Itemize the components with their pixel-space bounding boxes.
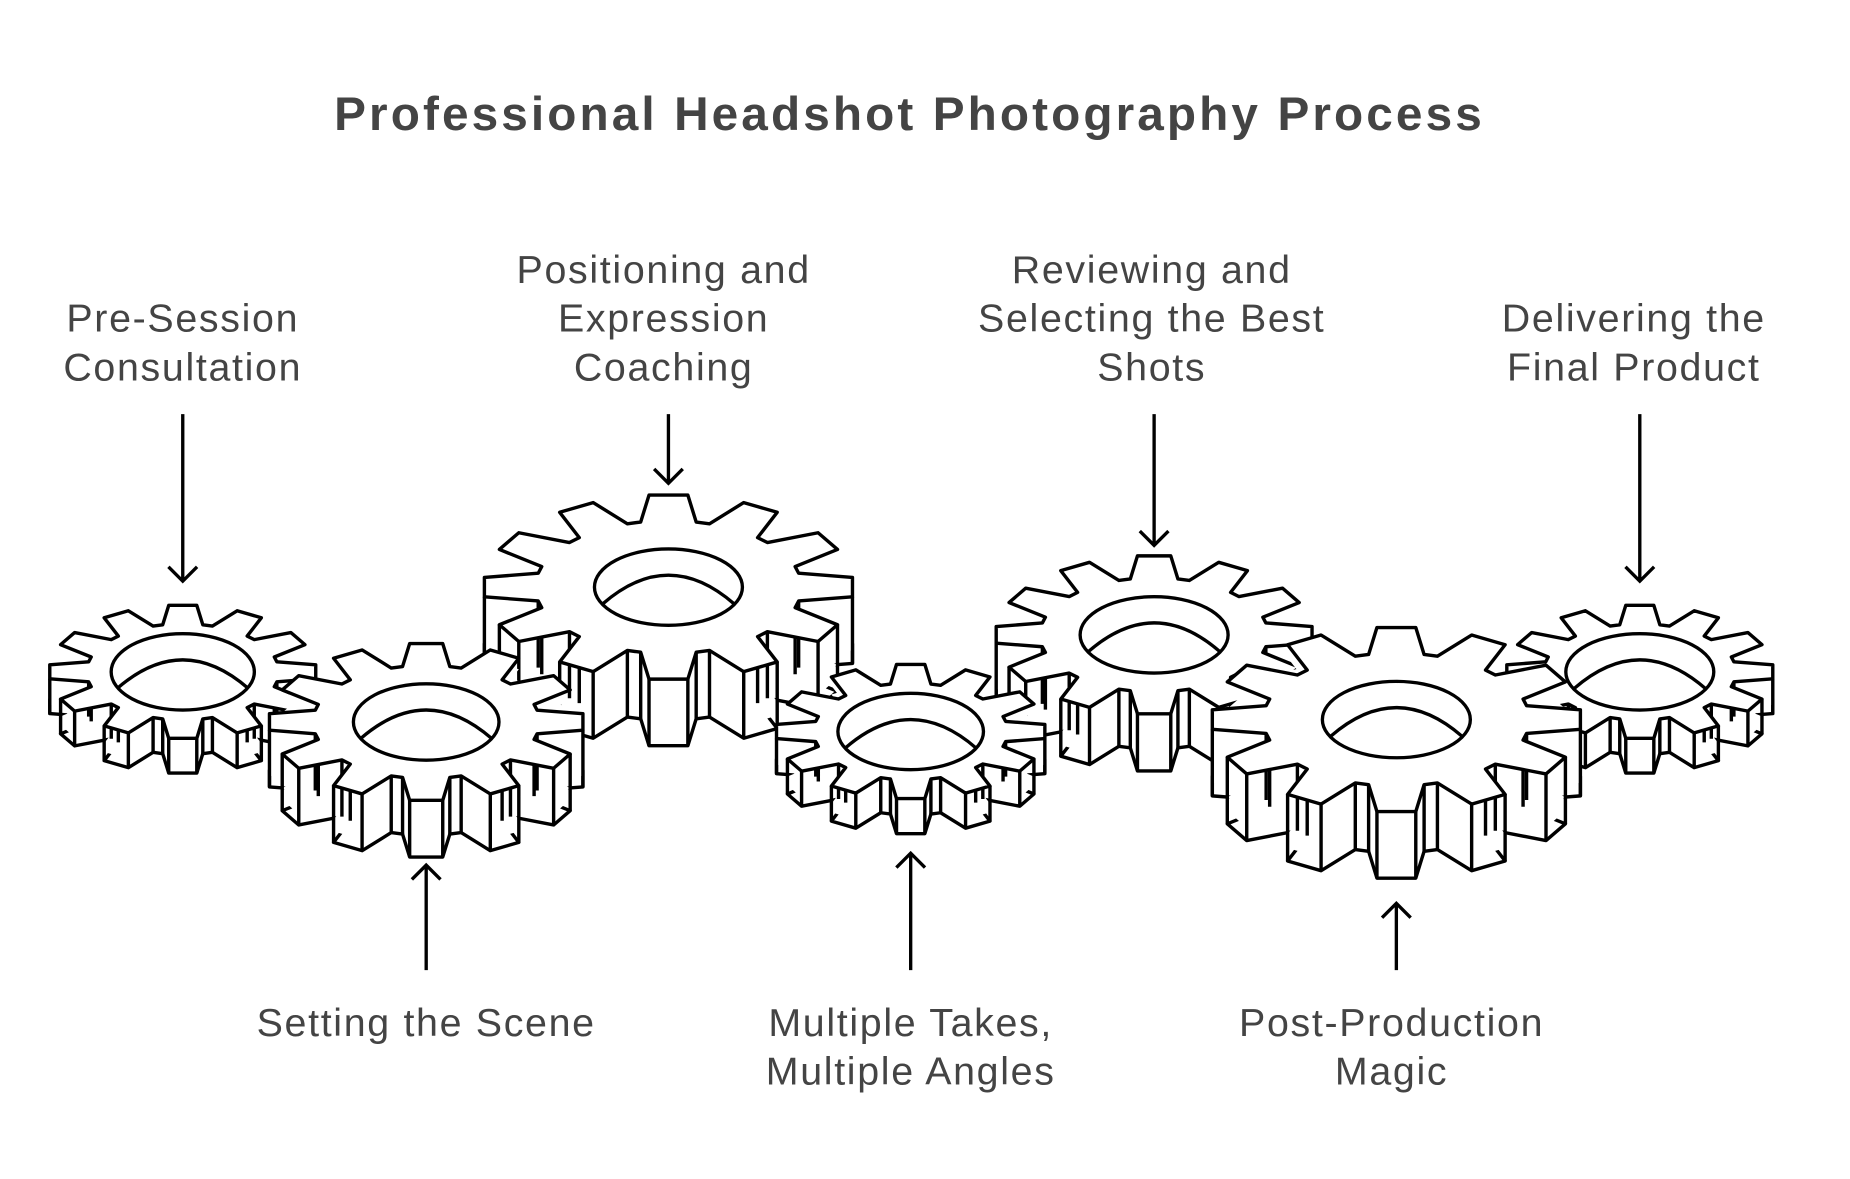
label: Reviewing and Selecting the Best Shots: Selecting the Best [978, 297, 1325, 341]
label: Multiple Takes, Multiple Angles: Multiple Angles [766, 1050, 1056, 1094]
gear 2: Setting the Scene [269, 644, 583, 857]
arrow: down to gear 3 [654, 414, 683, 483]
label: Post-Production Magic: Magic [1335, 1050, 1448, 1094]
label: Reviewing and Selecting the Best Shots: Shots [1097, 346, 1206, 390]
gear 7: Delivering the Final Product [1507, 605, 1773, 773]
gear 5: Reviewing and Selecting [996, 556, 1312, 771]
arrow: down to gear 7 [1625, 414, 1654, 581]
arrow: down to gear 1 [168, 414, 197, 581]
arrow: down to gear 5 [1140, 414, 1168, 545]
arrow: up to gear 4 [896, 853, 925, 970]
label: Delivering the Final Product: Final Product [1507, 346, 1761, 390]
label: Delivering the Final Product: Delivering the [1502, 297, 1766, 341]
label: Pre-Session Consultation: Pre-Session [66, 297, 299, 341]
label: Positioning and Expression Coaching: Positioning and [517, 248, 811, 292]
arrow: up to gear 2 [412, 865, 441, 970]
gear 6: Post-Production Magic [1212, 628, 1580, 878]
label: Reviewing and Selecting the Best Shots: Reviewing and [1012, 248, 1292, 292]
label: Pre-Session Consultation: Consultation [63, 346, 302, 390]
gear 3: Positioning and Expression Coaching [484, 495, 852, 746]
gear 1: Pre-Session Consultation [50, 605, 316, 773]
gear 4: Multiple Takes [777, 664, 1045, 834]
label: Positioning and Expression Coaching: Coaching [574, 346, 753, 390]
title: Professional Headshot Photography Process [334, 88, 1485, 141]
label: Post-Production Magic: Post-Production [1239, 1001, 1544, 1045]
label: Multiple Takes, Multiple Angles: Multiple Takes, [768, 1001, 1053, 1045]
arrow: up to gear 6 [1382, 903, 1411, 970]
label: Positioning and Expression Coaching: Expression [558, 297, 769, 341]
label: Setting the Scene: Setting the Scene [257, 1001, 596, 1045]
